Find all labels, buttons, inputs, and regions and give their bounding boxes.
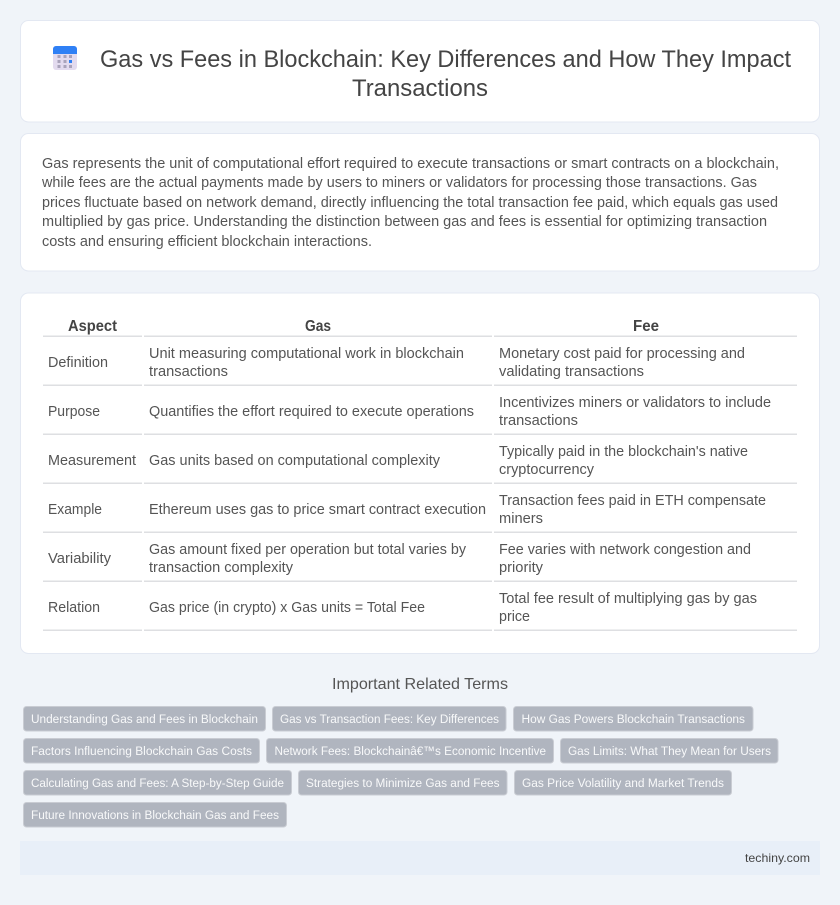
row: variability: transaction complexity	[149, 560, 294, 576]
row: relation: Gas price (in crypto) x Gas units = Total Fee	[149, 600, 425, 616]
row: example: miners	[499, 511, 543, 527]
tag	[24, 770, 292, 795]
title: Gas vs Fees in Blockchain: Key Differences and How They Impact	[100, 46, 791, 73]
icon: calendar	[53, 46, 77, 70]
row: purpose	[48, 395, 771, 429]
title: Transactions	[352, 75, 488, 102]
row: definition	[48, 346, 745, 380]
row: definition: Monetary cost paid for processing and	[499, 346, 745, 362]
footer	[20, 841, 820, 875]
tag	[514, 770, 732, 795]
row: measurement: Gas units based on computational complexity	[149, 453, 441, 469]
tag	[24, 802, 286, 827]
tag: Calculating Gas and Fees: A Step-by-Step Guide	[31, 776, 284, 790]
tag: Network Fees: Blockchainâ€™s Economic Incentive	[274, 744, 546, 758]
table header	[68, 318, 659, 335]
row: relation	[48, 591, 757, 625]
tag: Future Innovations in Blockchain Gas and Fees	[31, 808, 279, 822]
intro paragraph: Gas represents the unit of computational effort required to execute transactions or smart contracts on a blockchain,	[42, 156, 779, 172]
row: relation: Relation	[48, 600, 100, 616]
row: definition: transactions	[149, 364, 228, 380]
tag: Gas Price Volatility and Market Trends	[522, 776, 724, 790]
row: measurement: Measurement	[48, 453, 136, 469]
tag	[266, 738, 554, 763]
intro paragraph: while fees are the actual payments made by users to miners or validators for processing those transactions. Gas	[41, 175, 757, 191]
row: variability	[48, 542, 751, 576]
tag	[560, 738, 778, 763]
tag: Understanding Gas and Fees in Blockchain	[31, 712, 258, 726]
heading: related terms: Important Related Terms	[332, 676, 508, 693]
row: measurement: cryptocurrency	[499, 462, 595, 478]
intro paragraph: prices fluctuate based on network demand, directly influencing the total transaction fee paid, which equals gas used	[42, 195, 778, 211]
row: variability: Fee varies with network congestion and	[499, 542, 751, 558]
tag: Gas vs Transaction Fees: Key Differences	[280, 712, 499, 726]
row: example: Transaction fees paid in ETH compensate	[499, 493, 766, 509]
panel: intro text card	[20, 134, 820, 271]
intro paragraph: multiplied by gas price. Understanding the distinction between gas and fees is essential for optimizing transaction	[42, 214, 767, 230]
tag: Factors Influencing Blockchain Gas Costs	[31, 744, 252, 758]
row: purpose: Quantifies the effort required to execute operations	[149, 404, 474, 420]
row: definition: validating transactions	[499, 364, 644, 380]
row: variability: Variability	[48, 551, 112, 567]
table header: Fee	[633, 318, 659, 335]
row: purpose: transactions	[499, 413, 578, 429]
tag: Strategies to Minimize Gas and Fees	[306, 776, 500, 790]
panel: title card	[20, 20, 820, 122]
row: example: Example	[48, 502, 102, 518]
row: measurement: Typically paid in the blockchain's native	[499, 444, 748, 460]
row: measurement	[48, 444, 748, 478]
panel: related term tags	[24, 706, 778, 827]
tag: How Gas Powers Blockchain Transactions	[522, 712, 745, 726]
row: example	[48, 493, 766, 527]
table header: Aspect	[68, 318, 118, 335]
row: definition: Definition	[48, 355, 108, 371]
row: definition: Unit measuring computational work in blockchain	[149, 346, 464, 362]
intro paragraph	[41, 156, 779, 250]
footer: techiny.com	[745, 851, 810, 865]
row: purpose: Purpose	[48, 404, 100, 420]
tag	[24, 738, 260, 763]
panel: comparison table card	[20, 293, 820, 654]
intro paragraph: costs and ensuring efficient blockchain interactions.	[42, 234, 372, 250]
tag: Gas Limits: What They Mean for Users	[568, 744, 771, 758]
tag	[24, 706, 266, 731]
row: purpose: Incentivizes miners or validators to include	[499, 395, 771, 411]
tag	[298, 770, 507, 795]
row: variability: priority	[499, 560, 544, 576]
tag	[514, 706, 753, 731]
row: variability: Gas amount fixed per operation but total varies by	[149, 542, 467, 558]
row: relation: price	[499, 609, 530, 625]
tag	[272, 706, 506, 731]
title	[100, 46, 791, 102]
table header: Gas	[305, 318, 331, 335]
row: example: Ethereum uses gas to price smart contract execution	[149, 502, 486, 518]
row: relation: Total fee result of multiplying gas by gas	[499, 591, 757, 607]
